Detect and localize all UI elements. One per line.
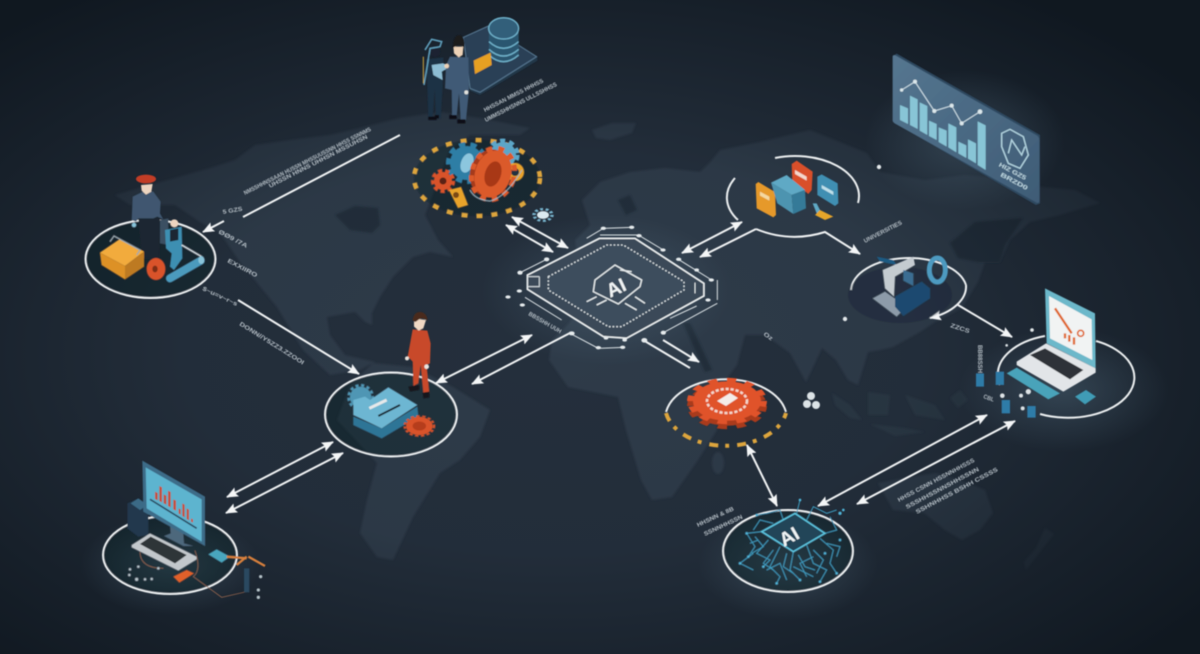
captions: left node: DONN//Y5ZZ3.ZZOOI [238,322,305,367]
person: left analyst [423,39,452,120]
person: right analyst [444,35,469,123]
node: data devices [727,156,859,220]
panel caption: BRZD0 [999,172,1029,192]
captions: left node [201,127,372,367]
icon: yellow key [449,187,468,208]
blue server [771,175,806,214]
captions: AI node: SSNNHHSSN [703,515,744,538]
captions: AI node: HHSS CSNN HSSNNHHSSS [897,458,976,504]
keyboard [132,533,197,571]
captions: laptop side: BB88SSH [976,345,982,373]
captions: AI node: SSHNHHSS BSHH CSSSS [915,467,999,516]
wires [470,170,522,201]
icon: AI chip symbol [587,265,645,310]
caption: team: UMMSSHHSNNS ULLSSHHSS [484,82,558,124]
database platform [463,18,537,95]
captions: AI node: HHSNN & 8B [696,506,736,529]
small laptop [813,203,833,220]
icon: blue gear [449,145,485,181]
circuit nodes [505,226,714,349]
node: industrial tools [86,175,216,298]
circuit nodes [739,499,845,585]
node: AI circuit chip [723,499,853,592]
monitor [142,461,205,546]
captions: left node: NMSSHHNSSAAN HUSSN MHSSUUSSNN HHSS SSNNMS [243,127,372,197]
blue card [817,174,838,206]
icon: AI chip symbol: AI [603,275,630,302]
machine column [877,257,915,297]
captions: AI node: SSSHHSSNNSHHSSNN [905,467,980,511]
icon: big orange gear [463,142,521,205]
soft glows [80,70,1169,620]
blue cylinder [170,245,204,278]
captions: left node: ØØ9 /7A [217,229,249,250]
chip body [527,238,704,338]
line chart [900,80,982,125]
central AI chip [505,226,717,349]
chip [762,513,825,552]
laptop base [1017,343,1096,392]
teal mat [1007,368,1096,404]
small cube cluster [803,392,820,409]
icon: large orange gear [691,380,763,427]
captions: left node: EXXIIRO [226,258,258,279]
inland seas [335,195,1023,372]
panel caption [997,162,1029,192]
world map [115,112,1100,570]
icon: small gear [534,209,552,221]
red device [792,161,813,194]
captions: laptop side: CBL [982,394,995,404]
person in red [405,312,431,398]
captions: left node: UHSSN HNNS UHHSN MSSUHSN [268,134,369,190]
small blue connectors [976,372,1036,418]
panel caption: HIZ GZ5 [997,162,1027,182]
tower [127,498,148,537]
bar chart [900,96,986,170]
node: monitor workstation [103,461,265,599]
captions: laptop side: UNIVERSITIES [863,220,903,245]
team with database platform [423,18,537,123]
blue ring [929,258,945,282]
orange device [756,182,776,217]
scattered dots [843,165,1034,332]
chip label: AI [776,524,803,552]
connector arrows [203,135,1015,513]
chip inner outline [548,245,684,327]
node: AI tools with person [325,312,457,456]
person with cap [132,175,163,258]
machine base [873,282,930,317]
orange disc [147,258,165,280]
captions: left node: 5 GZS [222,207,243,216]
captions: left node: $~u=v~r~s [201,286,239,308]
captions: laptop side: Oz [762,332,773,342]
toolbox [100,236,144,279]
node: laptop [976,288,1134,418]
mouse and teal box [173,549,230,583]
laptop screen [1045,288,1096,368]
gears with dashed ring [414,140,540,216]
captions: AI node [696,458,999,538]
node: machine [848,257,966,323]
puzzle block [349,385,418,438]
small white parts [1000,328,1034,410]
node: orange gear with ring [666,379,786,446]
icon: hexagon emblem [1002,129,1028,168]
captions: laptop side: ZZCS [949,323,970,335]
icon: small orange gear [433,171,453,191]
icon: yellow gear [506,163,524,181]
captions: laptop side [762,220,995,404]
icon: back blue gear [489,141,517,169]
circuit traces [740,500,840,583]
blue figure [160,218,182,270]
circuit traces [520,227,717,348]
small orange gear [405,416,434,436]
caption: team: HHSSAN MMSS HHHSS [483,78,545,114]
panel: analytics dashboard [893,54,1040,205]
wires and cable bundle [140,551,265,597]
caption: chip: BBSSHH UUH [527,312,562,335]
scattered components [128,565,262,599]
